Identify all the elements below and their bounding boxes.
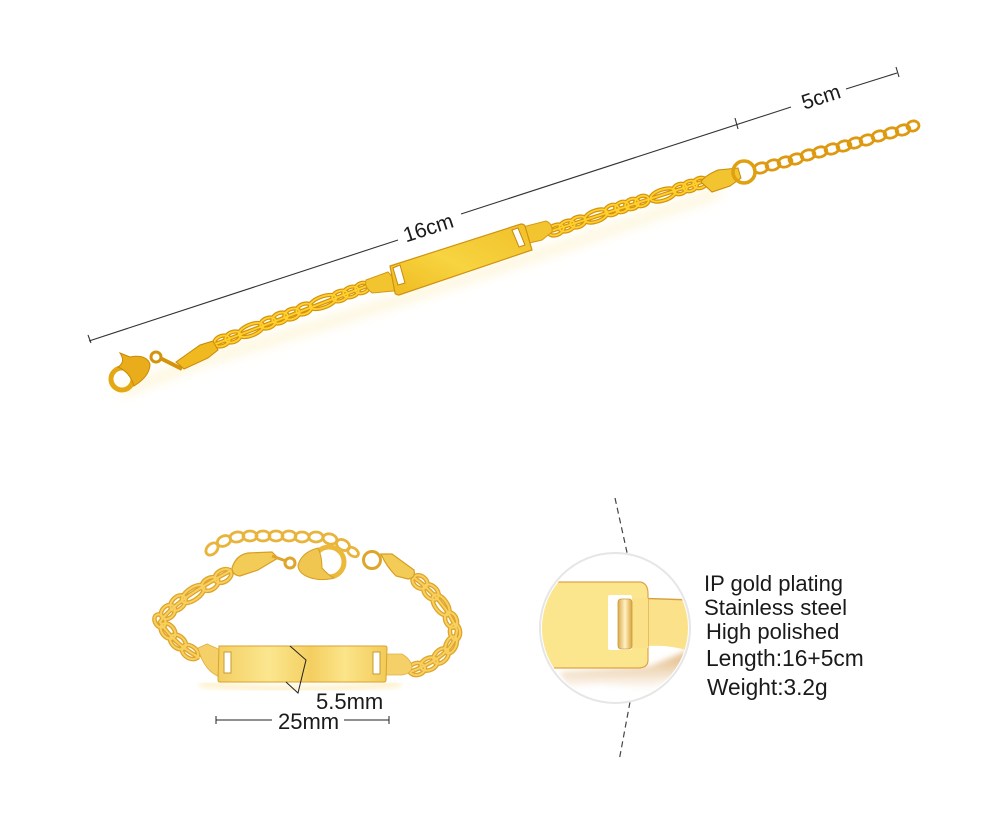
spec: length: Length:16+5cm (706, 645, 864, 671)
lower right tab (381, 554, 414, 579)
spec: plating: IP gold plating (704, 571, 843, 596)
right ring (364, 552, 380, 568)
lower bracelet (152, 531, 461, 689)
lower left tab (232, 552, 278, 576)
band over plate (647, 598, 648, 648)
lobster clasp (298, 547, 344, 580)
bracelet soft shadow (120, 192, 720, 392)
top bracelet (111, 120, 920, 392)
length dimension lines (88, 67, 899, 343)
roller (618, 599, 632, 649)
right chain (408, 572, 461, 676)
lower bracelet shadow (200, 684, 400, 689)
label: 5cm: 5cm (799, 80, 844, 115)
extender curb chain (753, 120, 920, 175)
spec: weight: Weight:3.2g (707, 674, 828, 700)
spec: material: Stainless steel (704, 595, 847, 620)
lower plate right tab (378, 654, 412, 675)
jump ring (733, 161, 755, 183)
left figaro chain (213, 281, 370, 349)
cast shadow (560, 650, 690, 690)
lower name plate (218, 646, 387, 682)
right figaro chain (547, 176, 708, 238)
label: 16cm: 16cm (400, 210, 456, 247)
label: 5.5mm: 5.5mm (316, 689, 383, 714)
spec: finish: High polished (706, 619, 839, 644)
lower plate left tab (198, 644, 225, 678)
left connector tab (366, 272, 398, 293)
small ring (285, 558, 295, 568)
connector band (648, 599, 688, 650)
label: 25mm: 25mm (278, 709, 339, 734)
plate corner (535, 582, 648, 668)
dashed callout line top (615, 498, 628, 557)
left end tab (176, 341, 218, 369)
dimension line: 25mm (216, 716, 389, 724)
infographic canvas (88, 66, 920, 758)
name plate (390, 224, 532, 295)
magnified detail circle (535, 553, 692, 703)
lobster clasp (111, 352, 182, 390)
extender chain (204, 531, 360, 559)
left chain (152, 566, 234, 662)
spec list (704, 571, 864, 700)
width bracket marker (286, 646, 306, 693)
right connector tab (515, 221, 552, 244)
dashed callout line bottom (619, 702, 630, 761)
slot (608, 595, 632, 650)
right end tab (701, 168, 741, 192)
